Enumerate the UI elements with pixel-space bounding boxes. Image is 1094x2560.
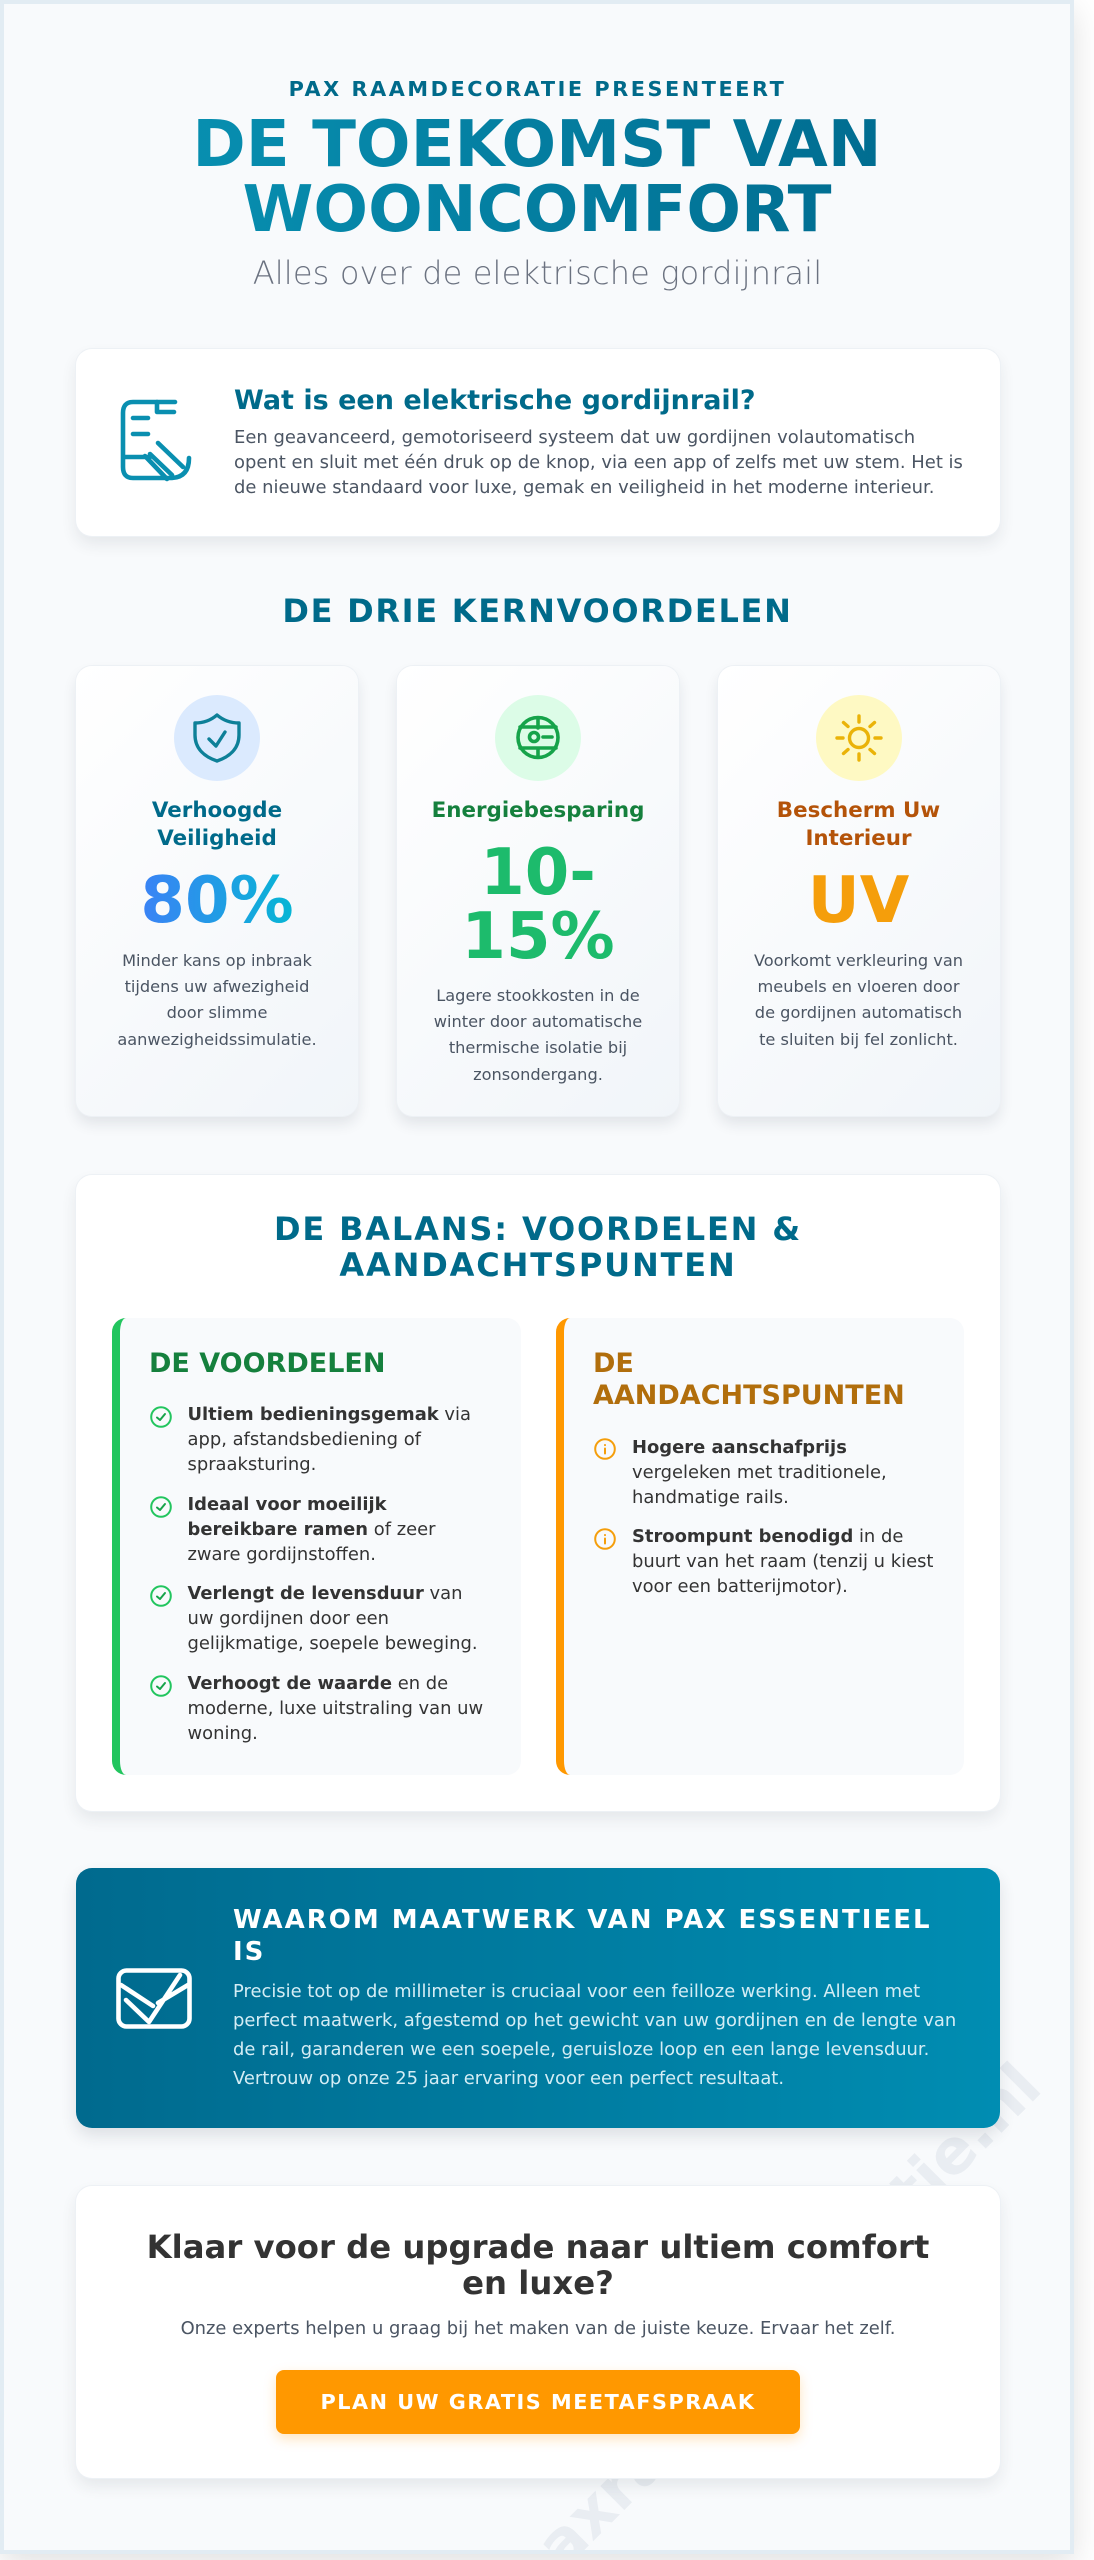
description: zonsondergang.: [473, 1065, 603, 1084]
heading: AANDACHTSPUNTEN: [593, 1380, 905, 1411]
list item: Hogere aanschafprijs: [632, 1436, 847, 1458]
stat: 10-: [480, 836, 596, 910]
title: Verhoogde: [152, 798, 282, 823]
title: DE TOEKOMST VAN: [192, 106, 882, 182]
panel: call to action: [76, 2186, 1000, 2478]
heading: Wat is een elektrische gordijnrail?: [234, 385, 756, 416]
panel: waarom maatwerk: [76, 1868, 1000, 2128]
title: [777, 798, 940, 851]
heading: IS: [233, 1937, 265, 1967]
list item: spraaksturing.: [188, 1454, 316, 1475]
heading: DE VOORDELEN: [149, 1348, 385, 1379]
list item: voor een batterijmotor).: [632, 1576, 848, 1597]
description: Een geavanceerd, gemotoriseerd systeem dat uw gordijnen volautomatisch: [234, 427, 915, 448]
text: Precisie tot op de millimeter is cruciaal voor een feilloze werking. Alleen met: [233, 1981, 920, 2002]
icon: sun: [816, 695, 902, 781]
heading: DE: [593, 1348, 634, 1379]
stat: 80%: [140, 864, 294, 938]
list item: Ideaal voor moeilijk: [188, 1494, 387, 1515]
text: Vertrouw op onze 25 jaar ervaring voor een perfect resultaat.: [233, 2068, 784, 2089]
button: PLAN UW GRATIS MEETAFSPRAAK: [320, 2390, 756, 2414]
title: Energiebesparing: [432, 798, 644, 823]
button: [276, 2370, 800, 2434]
list item: woning.: [188, 1723, 258, 1744]
description: thermische isolatie bij: [449, 1038, 627, 1057]
heading: AANDACHTSPUNTEN: [339, 1246, 737, 1284]
heading: [274, 1210, 802, 1284]
list item: [632, 1436, 887, 1508]
description: de gordijnen automatisch: [755, 1003, 962, 1022]
heading: de drie kernvoordelen: DE DRIE KERNVOORDELEN: [282, 592, 793, 630]
list item: zware gordijnstoffen.: [188, 1544, 376, 1565]
title: Bescherm Uw: [777, 798, 940, 823]
heading: WAAROM MAATWERK VAN PAX ESSENTIEEL: [233, 1905, 932, 1935]
title: [137, 112, 937, 242]
description: Minder kans op inbraak: [122, 950, 312, 970]
pre-title: PAX RAAMDECORATIE PRESENTEERT: [289, 77, 786, 101]
list item: Stroompunt benodigd in de: [632, 1526, 903, 1547]
list item: vergeleken met traditionele,: [632, 1462, 887, 1482]
description: door slimme: [167, 1003, 267, 1022]
icon: check: [150, 1585, 172, 1607]
description: meubels en vloeren door: [757, 977, 960, 996]
heading: [233, 1905, 932, 1967]
panel: de balans: [76, 1175, 1000, 1811]
icon: document with rail: [120, 400, 192, 482]
heading: en luxe?: [462, 2264, 614, 2302]
icon: check: [150, 1406, 172, 1428]
list item: Verhoogt de waarde en de: [188, 1673, 448, 1694]
list item: Verlengt de levensduur van: [188, 1583, 462, 1604]
subtitle: Alles over de elektrische gordijnrail: [253, 254, 822, 292]
panel: energiebesparing: [397, 666, 679, 1116]
description: tijdens uw afwezigheid: [125, 977, 309, 996]
list item: uw gordijnen door een: [188, 1608, 389, 1629]
title: WOONCOMFORT: [243, 172, 831, 246]
heading: [147, 2228, 929, 2302]
description: Voorkomt verkleuring van: [754, 950, 963, 970]
heading: DE BALANS: VOORDELEN &: [274, 1210, 802, 1248]
heading: [593, 1348, 905, 1411]
description: winter door automatische: [434, 1012, 642, 1031]
description: de nieuwe standaard voor luxe, gemak en veiligheid in het moderne interieur.: [234, 477, 934, 498]
list item: gelijkmatige, soepele beweging.: [188, 1633, 478, 1654]
text: [233, 1981, 956, 2089]
list item: [188, 1673, 483, 1744]
list item: bereikbare ramen of zeer: [188, 1519, 436, 1540]
text: de rail, garanderen we een soepele, geruisloze loop en een lange levensduur.: [233, 2039, 929, 2060]
list item: app, afstandsbediening of: [188, 1429, 421, 1450]
title: [152, 798, 282, 851]
text: perfect maatwerk, afgestemd op het gewicht van uw gordijnen en de lengte van: [233, 2010, 956, 2031]
heading: Klaar voor de upgrade naar ultiem comfort: [147, 2228, 929, 2266]
description: [234, 427, 963, 498]
icon: envelope: [116, 1968, 192, 2029]
description: [754, 950, 963, 1049]
title: Interieur: [805, 826, 912, 851]
list item: buurt van het raam (tenzij u kiest: [632, 1551, 933, 1572]
icon: check: [150, 1496, 172, 1518]
description: [434, 986, 642, 1084]
text: Onze experts helpen u graag bij het maken van de juiste keuze. Ervaar het zelf.: [181, 2318, 895, 2339]
stat: 15%: [461, 900, 615, 974]
description: [117, 950, 317, 1049]
icon: globe: [495, 695, 581, 781]
panel: wat is een elektrische gordijnrail: [76, 349, 1000, 536]
list item: handmatige rails.: [632, 1486, 789, 1508]
title: Veiligheid: [157, 826, 277, 851]
list item: Ultiem bedieningsgemak via: [188, 1404, 471, 1425]
list item: [188, 1583, 478, 1654]
description: aanwezigheidssimulatie.: [117, 1030, 317, 1049]
list item: moderne, luxe uitstraling van uw: [188, 1698, 483, 1719]
list item: [632, 1526, 933, 1597]
stat: UV: [808, 864, 909, 938]
stat: [461, 836, 615, 974]
description: Lagere stookkosten in de: [436, 986, 640, 1004]
panel: veiligheid: [76, 666, 358, 1116]
list item: [188, 1404, 471, 1475]
icon: shield: [174, 695, 260, 781]
panel: aandachtspunten: [556, 1318, 964, 1775]
description: te sluiten bij fel zonlicht.: [759, 1030, 958, 1049]
icon: check: [150, 1675, 172, 1697]
icon: info: [594, 1528, 616, 1550]
list item: [188, 1494, 436, 1565]
icon: info: [594, 1438, 616, 1460]
panel: interieur: [718, 666, 1000, 1116]
description: opent en sluit met één druk op de knop, via een app of zelfs met uw stem. Het is: [234, 452, 963, 473]
panel: voordelen: [112, 1318, 521, 1775]
